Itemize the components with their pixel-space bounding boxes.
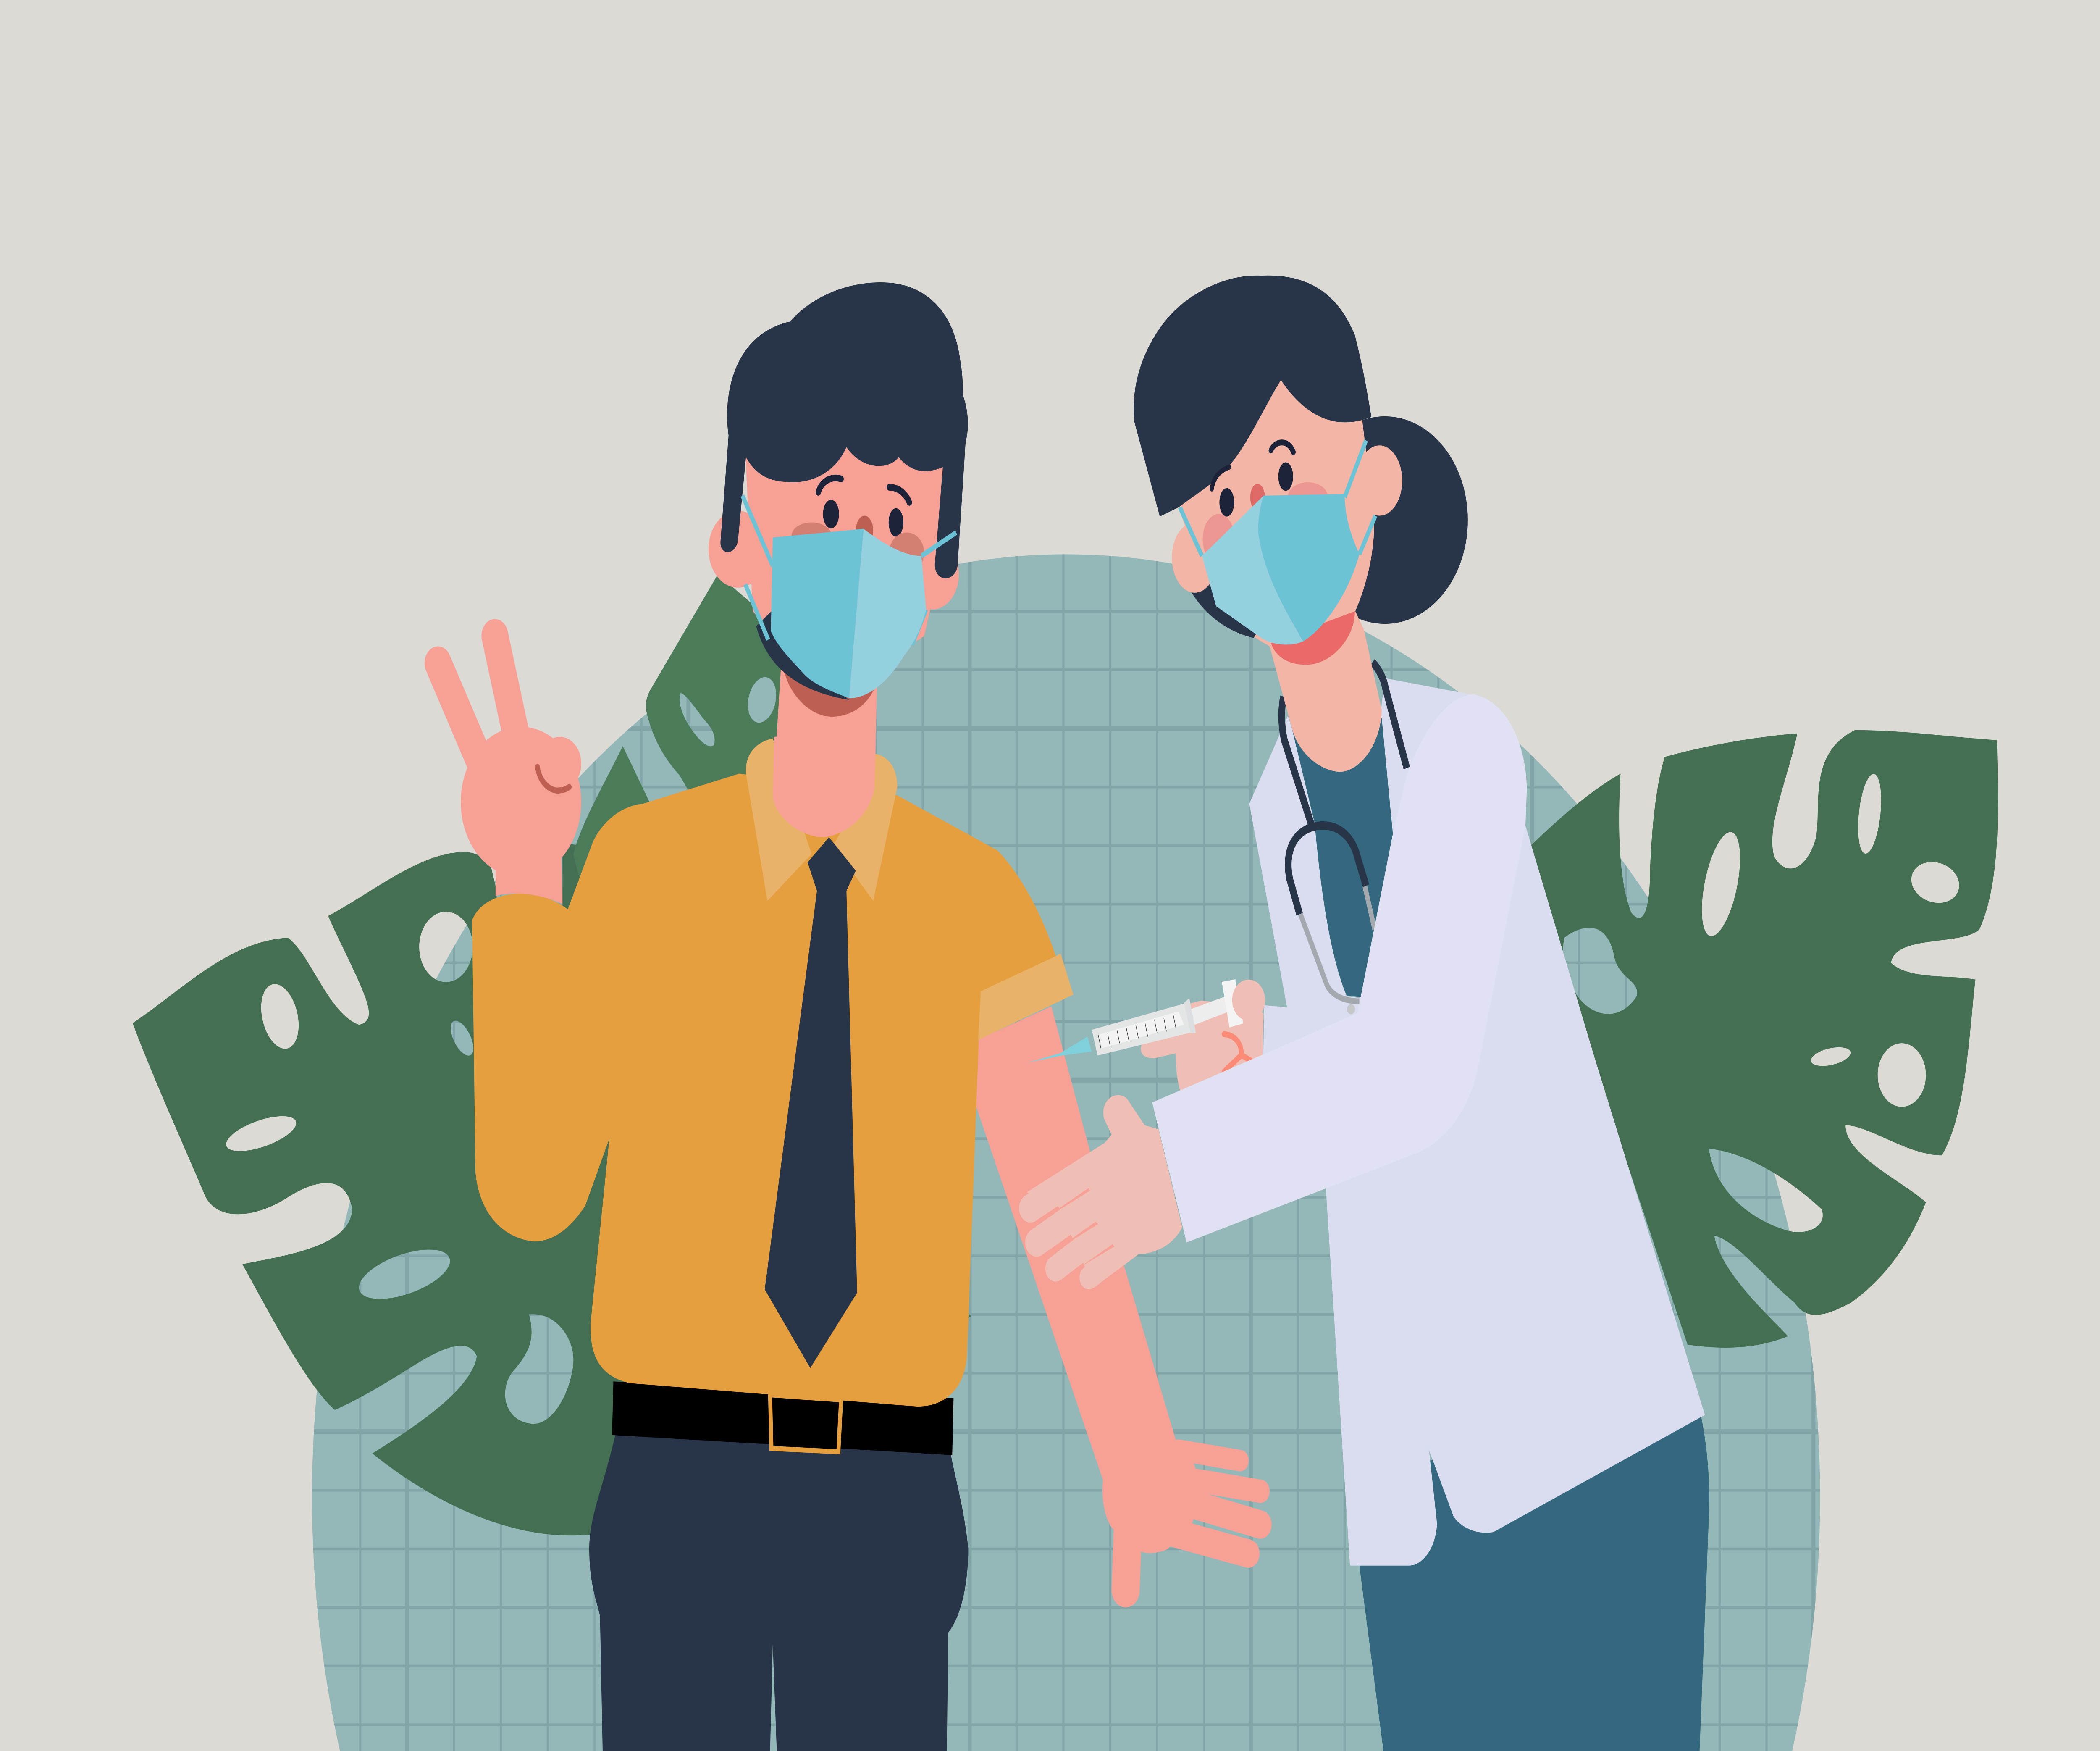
doctor: fingertip and ring [1224,980,1265,1072]
lower upper leaf tip [573,746,650,886]
doctor: lower hair [1175,552,1259,638]
man: hair [720,282,968,578]
doctor: coat body [1312,678,1705,1566]
doctor: mask [1180,440,1376,644]
doctor: trousers [1353,1415,1709,1751]
man: tie [765,837,857,1368]
doctor: sleeve [1152,694,1527,1242]
doctor: nose and cheeks [1203,482,1328,564]
man: raised hand [438,636,581,904]
man: sleeve hem [978,954,1073,1040]
man: neck shadow [785,673,874,717]
man [438,282,1260,1751]
doctor: coat left lapel [1249,716,1361,1072]
man: shirt [472,773,1058,1407]
doctor: syringe hand [1141,1001,1264,1097]
doctor: scrub top [1291,718,1393,997]
man: neck over collar [773,737,876,837]
doctor: stethoscope straps [1282,662,1407,824]
man: ears [709,511,959,610]
upper left leaf [646,574,790,790]
doctor: stethoscope loop and tubes [1288,826,1375,1014]
man: face [745,435,945,678]
man: nose and cheeks [792,516,924,573]
left leaf [133,844,630,1535]
small leaf tip beside shirt [962,1306,971,1323]
man: collar [746,739,897,901]
right leaf [1531,730,1998,1348]
doctor: hair [1134,276,1371,517]
man: mask [743,496,956,698]
doctor: left ear [1172,523,1218,593]
syringe [1027,979,1243,1063]
doctor: brows and eyes [1212,442,1293,517]
doctor: neck and face [1179,380,1382,772]
doctor: supporting hand [1027,1095,1182,1288]
doctor: smile [1271,611,1355,665]
man: beard [756,611,849,700]
man: forearm and hand [974,1006,1260,1590]
monstera leaves [133,574,1998,1535]
man: brows and eyes [818,478,909,536]
man: trousers [589,1432,968,1751]
man: belt and buckle [612,1381,953,1455]
backdrop circle with grid [308,552,1828,1751]
doctor [1027,276,1709,1751]
doctor: hair bun [1302,416,1468,624]
illustration: doctor vaccinating a man [133,276,1998,1751]
doctor: right ear [1357,445,1402,516]
man: neck [773,670,877,837]
